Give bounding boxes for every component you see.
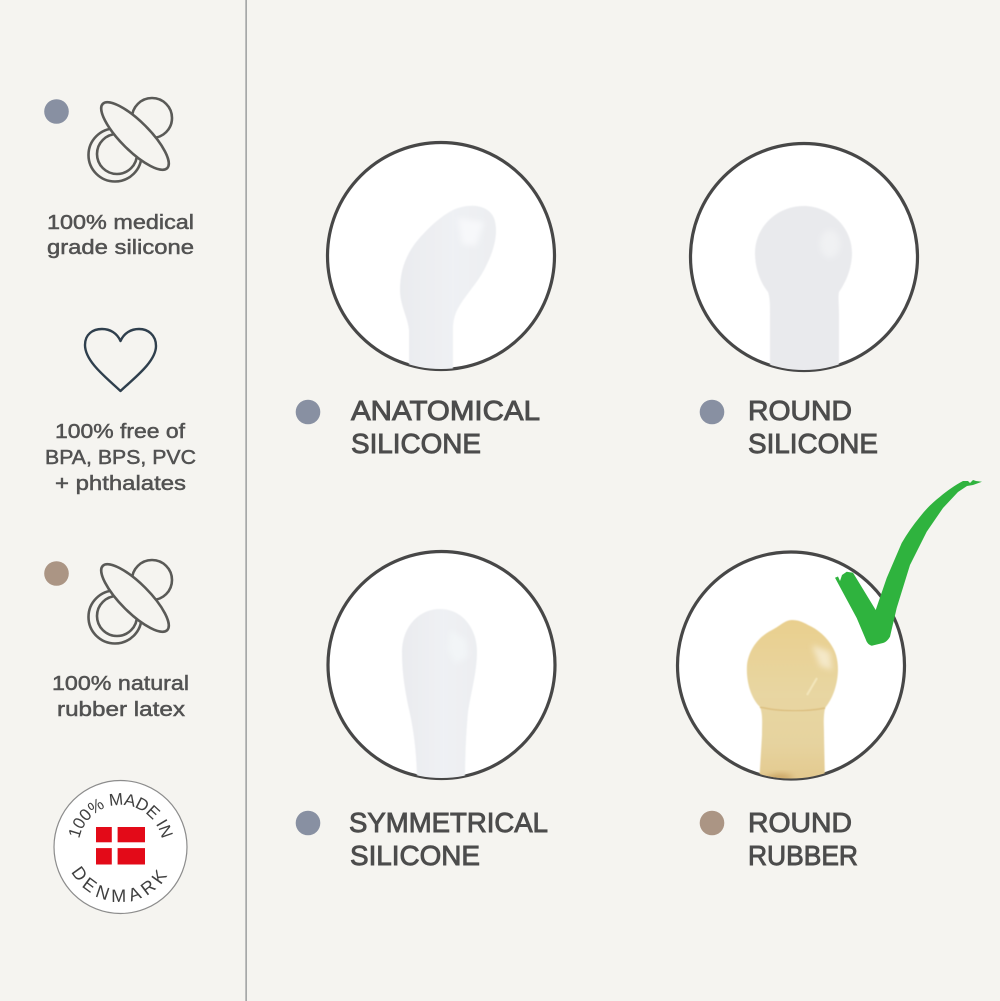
badge: 100% made in Denmark: DENMARK: [72, 866, 168, 902]
label: anatomical silicone: [351, 395, 540, 459]
circle: round silicone nipple: [690, 144, 918, 372]
icon: pacifier: [88, 94, 177, 182]
label: round rubber: RUBBER: [748, 840, 858, 871]
icon: heart: [85, 329, 156, 391]
label: round silicone: SILICONE: [748, 428, 878, 459]
circle: anatomical nipple: [328, 142, 554, 372]
label: 100% medical grade silicone: grade silicone: [47, 236, 194, 259]
label: round rubber: [748, 807, 858, 871]
sidebar divider: [246, 0, 247, 1001]
colour dot: rubber: [700, 811, 724, 835]
panel: round silicone: [690, 144, 918, 459]
feature: medical grade silicone: [44, 94, 194, 259]
label: 100% free of BPA, BPS, PVC + phthalates: 100% free of: [55, 420, 185, 443]
colour dot: silicone: [296, 400, 320, 424]
icon: pacifier: [88, 556, 177, 644]
label: 100% free of BPA, BPS, PVC + phthalates: BPA, BPS, PVC: [45, 446, 196, 469]
circle: symmetrical nipple: [328, 552, 555, 785]
label: 100% medical grade silicone: 100% medical: [47, 211, 194, 234]
colour dot: rubber: [44, 561, 69, 586]
label: round silicone: ROUND: [748, 395, 852, 426]
label: symmetrical silicone: [349, 807, 548, 871]
label: 100% natural rubber latex: rubber latex: [57, 698, 186, 721]
panel: round rubber: [678, 552, 904, 871]
colour dot: silicone: [700, 400, 724, 424]
label: 100% medical grade silicone: [47, 211, 194, 259]
label: 100% free of BPA, BPS, PVC + phthalates: [45, 420, 196, 495]
badge: 100% made in Denmark: 100% MADE IN: [69, 793, 173, 838]
circle: round rubber nipple: [678, 552, 904, 785]
label: anatomical silicone: SILICONE: [351, 428, 481, 459]
panel: material features sidebar: [44, 96, 196, 914]
panel: symmetrical silicone: [296, 552, 555, 871]
label: symmetrical silicone: SILICONE: [350, 840, 480, 871]
panel: anatomical silicone: [296, 142, 554, 459]
colour dot: silicone: [44, 99, 69, 124]
feature: free of BPA, BPS, PVC and phthalates: [45, 329, 196, 495]
label: anatomical silicone: ANATOMICAL: [351, 395, 540, 426]
label: round rubber: ROUND: [748, 807, 852, 838]
icon: Danish flag: [96, 827, 145, 864]
label: 100% natural rubber latex: [52, 672, 189, 721]
label: symmetrical silicone: SYMMETRICAL: [349, 807, 548, 838]
label: 100% free of BPA, BPS, PVC + phthalates: + phthalates: [55, 472, 186, 495]
badge: 100% made in Denmark: [53, 780, 188, 914]
feature: natural rubber latex: [44, 556, 189, 721]
icon: green check mark: [835, 480, 982, 646]
label: round silicone: [748, 395, 878, 459]
colour dot: silicone: [296, 811, 320, 835]
label: 100% natural rubber latex: 100% natural: [52, 672, 189, 695]
